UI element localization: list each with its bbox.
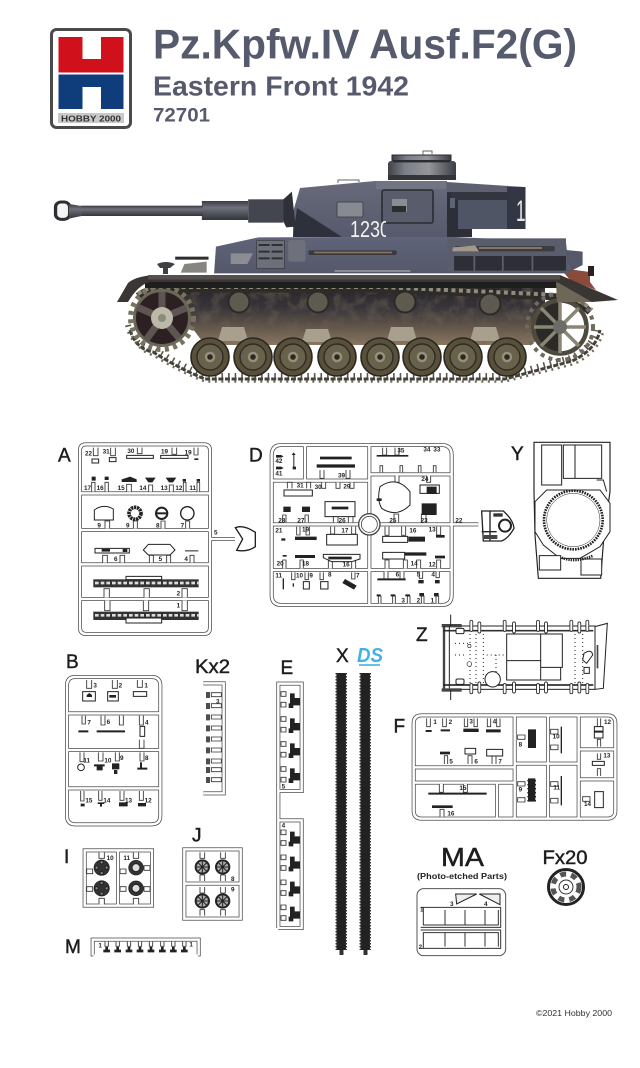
sprue D: 16 — [409, 527, 417, 534]
label J: J — [192, 826, 202, 846]
sprue A: 19 — [161, 448, 169, 455]
sprue F — [414, 715, 615, 819]
sprue A: 9 — [126, 523, 130, 530]
sprue M — [93, 940, 199, 954]
sprue B: 9 — [120, 755, 124, 762]
sprue D: 12 — [429, 562, 436, 569]
sprue F: 4 — [493, 718, 497, 725]
label Kx2: Kx2 — [195, 657, 230, 678]
turret — [293, 180, 526, 237]
sprue B: 12 — [145, 798, 152, 805]
label E: E — [280, 658, 293, 679]
sprue A: 16 — [97, 485, 104, 492]
sprue M: 1 — [98, 943, 102, 950]
label I: I — [64, 847, 69, 868]
sprue A: 30 — [127, 448, 135, 455]
logo: Hobby 2000 — [52, 30, 130, 128]
sprue I — [85, 850, 152, 906]
label Y: Y — [511, 444, 524, 465]
sprue M: 1 — [189, 942, 193, 949]
sprue J: 9 — [231, 887, 235, 894]
sprue D: 1 — [431, 597, 435, 604]
tank illustration — [56, 151, 618, 382]
photo-etched fret MA: 1 — [420, 907, 424, 914]
sprue K x2 — [203, 683, 224, 793]
sprue D: 7 — [356, 573, 360, 580]
photo-etched fret MA — [417, 889, 506, 956]
logo: Hobby 2000: HOBBY 2000 — [61, 114, 121, 124]
sprue D: 21 — [275, 527, 283, 534]
sprue A: 31 — [103, 448, 110, 455]
fenders — [117, 262, 618, 302]
sprue D: 29 — [343, 483, 351, 490]
sprue D: 5 — [417, 572, 421, 579]
sprue K x2: 3 — [216, 699, 220, 706]
sprue D: 23 — [421, 517, 428, 524]
sprue D: 19 — [302, 527, 310, 534]
sprue A: 1 — [177, 603, 181, 610]
idler wheel — [527, 294, 593, 360]
upper hull — [175, 237, 583, 273]
turret number 1230: 1230 — [350, 216, 390, 242]
sprue D: 27 — [297, 517, 305, 524]
sprue F: 7 — [498, 758, 502, 765]
sprue B: 8 — [145, 755, 149, 762]
sprue D: 4 — [431, 572, 435, 579]
sprue B: 10 — [104, 757, 112, 764]
long hull side parts 1 and 2 — [93, 576, 199, 623]
sprue D: 39 — [338, 473, 346, 480]
copyright: ©2021 Hobby 2000 — [536, 1008, 612, 1018]
sprue D: 16 — [343, 562, 350, 569]
sprue B — [67, 677, 160, 824]
sprue A: 15 — [118, 485, 125, 492]
sprue E — [278, 684, 302, 928]
sprue B: 3 — [93, 682, 97, 689]
sprue I: 10 — [107, 855, 114, 862]
product number: 72701 — [153, 106, 210, 126]
sprue F: 12 — [604, 719, 612, 726]
sprue B: 15 — [85, 798, 93, 805]
part 5 turret front — [235, 527, 255, 551]
sprue A: 11 — [189, 485, 197, 492]
photo-etched fret MA: 4 — [484, 901, 488, 908]
sprue J — [184, 849, 241, 919]
label X: X — [336, 646, 349, 667]
drive sprocket — [130, 286, 194, 350]
sprue A: 7 — [181, 523, 185, 530]
sprue A: 5 — [214, 529, 218, 536]
sprue B: 6 — [107, 719, 111, 726]
part F wheel — [548, 870, 584, 904]
sprue B: 7 — [87, 719, 91, 726]
sprue A — [80, 444, 255, 634]
sprue B: 2 — [119, 682, 123, 689]
sprue D: 35 — [397, 447, 405, 454]
label D: D — [249, 446, 263, 466]
sprue F: 13 — [603, 752, 611, 759]
sprue D — [272, 442, 610, 605]
sprue D: 14 — [411, 561, 418, 568]
cupola — [388, 151, 456, 180]
sprue D: 25 — [389, 517, 397, 524]
sprue D: 18 — [302, 561, 310, 568]
label A: A — [58, 446, 71, 466]
sprue F: 15 — [459, 785, 467, 792]
photo-etched fret MA: 2 — [419, 944, 423, 951]
sprue F: 2 — [449, 719, 453, 726]
sprue F: 6 — [474, 758, 478, 765]
sprue I: 11 — [123, 855, 131, 862]
caption photo-etched parts: (Photo-etched Parts) — [417, 871, 507, 881]
sprue F: 16 — [447, 810, 455, 817]
sprue D: 17 — [341, 527, 349, 534]
sprue A: 2 — [177, 591, 181, 598]
sprue F: 5 — [449, 758, 453, 765]
sprue A: 17 — [84, 485, 92, 492]
sprue B: 13 — [125, 798, 133, 805]
part Y turret hull top — [534, 442, 610, 578]
sprue D: 42 — [275, 458, 283, 465]
sprue A: 8 — [156, 523, 160, 530]
sprue A: 19 — [185, 449, 192, 456]
sprue D: 9 — [309, 573, 313, 580]
sprue D: 31 — [297, 483, 304, 490]
sprue A: 6 — [114, 556, 118, 563]
subtitle: Eastern Front 1942 — [153, 70, 409, 102]
label F: F — [394, 716, 405, 738]
part Z chassis — [442, 615, 607, 700]
sprue F: 11 — [553, 784, 561, 791]
label Fx20: Fx20 — [542, 848, 588, 869]
sprue D: 26 — [339, 517, 346, 524]
sprue F: 3 — [469, 718, 473, 725]
sprue B: 11 — [83, 757, 91, 764]
sprue D: 30 — [315, 484, 322, 491]
photo-etched fret MA: 3 — [450, 901, 454, 908]
sprue B: 1 — [144, 682, 148, 689]
sprue F: 1 — [433, 719, 437, 726]
label MA: MA — [441, 842, 485, 872]
sprue D: 11 — [275, 573, 283, 580]
sprue D: 33 — [433, 447, 441, 454]
title: Pz.Kpfw.IV Ausf.F2(G) — [153, 20, 577, 68]
sprue D: 28 — [278, 517, 286, 524]
sprue D: 3 — [401, 597, 405, 604]
sprue D: 34 — [423, 447, 431, 454]
return track upper — [138, 287, 592, 312]
sprue D: 24 — [421, 476, 429, 483]
lower track run — [128, 325, 603, 382]
sprue D: 10 — [296, 573, 304, 580]
icon: DS logo: DS — [357, 645, 384, 667]
part 22 turret front — [482, 511, 514, 541]
sprue D: 20 — [277, 561, 284, 568]
sprue B: 4 — [145, 719, 149, 726]
sprue D: 2 — [417, 597, 421, 604]
sprue D: 13 — [429, 527, 436, 534]
track X right — [360, 673, 370, 955]
return rollers — [228, 292, 500, 314]
sprue J: 8 — [231, 876, 235, 883]
road wheels — [191, 338, 526, 376]
sprue F: 9 — [519, 787, 523, 794]
sprue F: 14 — [584, 801, 592, 808]
sprue D: 8 — [328, 572, 332, 579]
sprue D: 22 — [455, 517, 463, 524]
label B: B — [66, 652, 79, 673]
label M: M — [65, 937, 81, 958]
sprue D: 41 — [275, 471, 283, 478]
sprue F: 8 — [519, 742, 523, 749]
sprue D: 6 — [396, 572, 400, 579]
bustle number 12: 12 — [516, 195, 535, 228]
sprue A: 13 — [161, 485, 168, 492]
track X left — [336, 673, 346, 955]
lower hull with mud — [170, 280, 545, 345]
sprue A: 5 — [159, 556, 163, 563]
sprue B: 14 — [103, 798, 111, 805]
bogie brackets — [218, 327, 500, 342]
sprue A: 22 — [85, 451, 93, 458]
sprue A: 9 — [97, 523, 101, 530]
sprue E: 5 — [282, 783, 286, 790]
sprue A: 12 — [175, 485, 183, 492]
label Z: Z — [416, 625, 428, 646]
sprue F: 10 — [553, 733, 560, 740]
sprue E: 4 — [282, 823, 286, 830]
sprue A: 14 — [139, 485, 147, 492]
sprue A: 4 — [184, 556, 188, 563]
gun — [56, 192, 296, 227]
